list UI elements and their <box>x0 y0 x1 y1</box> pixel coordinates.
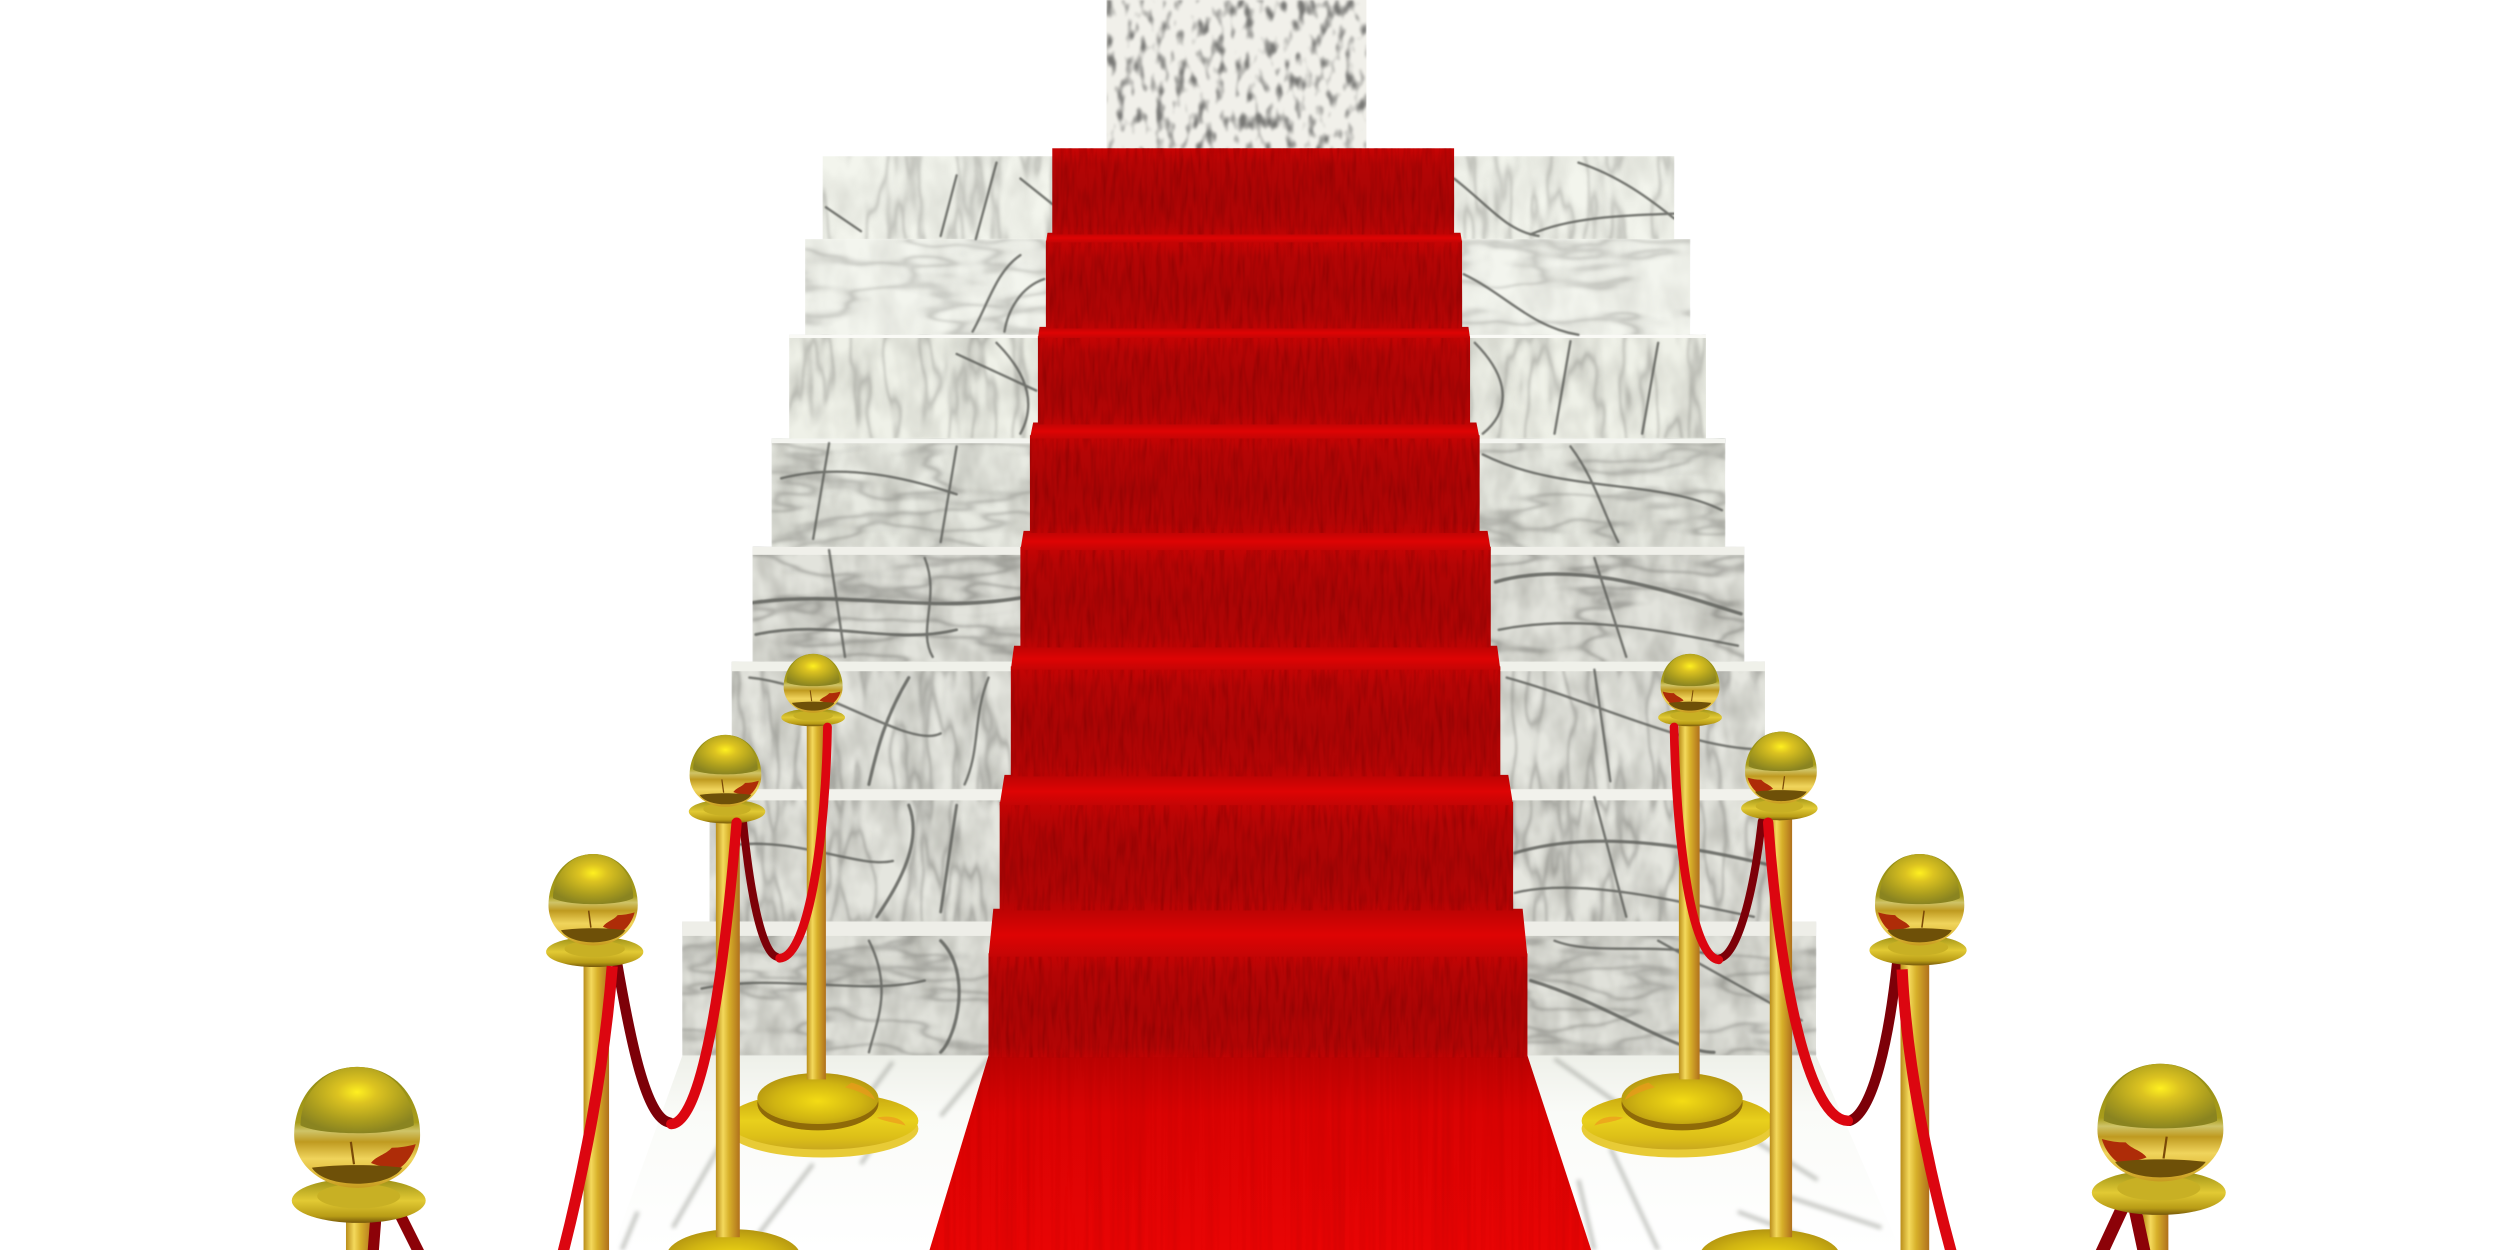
rope: left rear section <box>743 727 827 958</box>
marble step 5 <box>753 547 1744 662</box>
stanchion: left, rear <box>727 654 918 1158</box>
stanchion: right, front <box>2092 1064 2226 1250</box>
carpet step 8 <box>989 909 1527 1057</box>
marble step 4 <box>772 438 1725 547</box>
rope: right front section <box>1902 969 1952 1250</box>
marble step 3 <box>789 335 1706 438</box>
marble step 7 <box>710 789 1789 922</box>
stanchion: right, second <box>1869 854 1967 1250</box>
marble steps <box>682 156 1816 1055</box>
stanchion: right, third <box>1700 732 1840 1250</box>
carpet step 2 <box>1046 233 1462 328</box>
stanchion: left, front <box>292 1067 426 1250</box>
red carpet <box>930 148 1591 1250</box>
carpet step 5 <box>1020 531 1491 647</box>
marble step 2 <box>805 239 1690 335</box>
rope: left front section <box>563 966 612 1250</box>
marble step 6 <box>732 662 1765 789</box>
marble pillar at the top <box>1107 0 1366 150</box>
marble step 8 <box>682 922 1816 1055</box>
rope: left middle section <box>617 823 737 1124</box>
stanchion: left, third <box>666 735 800 1250</box>
marble floor <box>612 1055 1904 1250</box>
stanchion: left, second <box>546 854 643 1250</box>
marble step 1 <box>823 156 1674 239</box>
marble cracks <box>702 163 1802 1052</box>
carpet step 4 <box>1030 423 1480 533</box>
stanchion: right, rear <box>1582 654 1773 1158</box>
carpet step 3 <box>1038 327 1470 424</box>
carpet runner on the floor <box>930 1055 1591 1250</box>
illustration: red carpet on marble stairs with gold stanchions <box>292 0 2226 1250</box>
carpet step 7 <box>1000 775 1513 910</box>
carpet step 6 <box>1011 646 1500 776</box>
rope: right rear section <box>1674 727 1762 960</box>
carpet step 1 <box>1052 148 1454 234</box>
rope: right middle section <box>1768 823 1897 1121</box>
